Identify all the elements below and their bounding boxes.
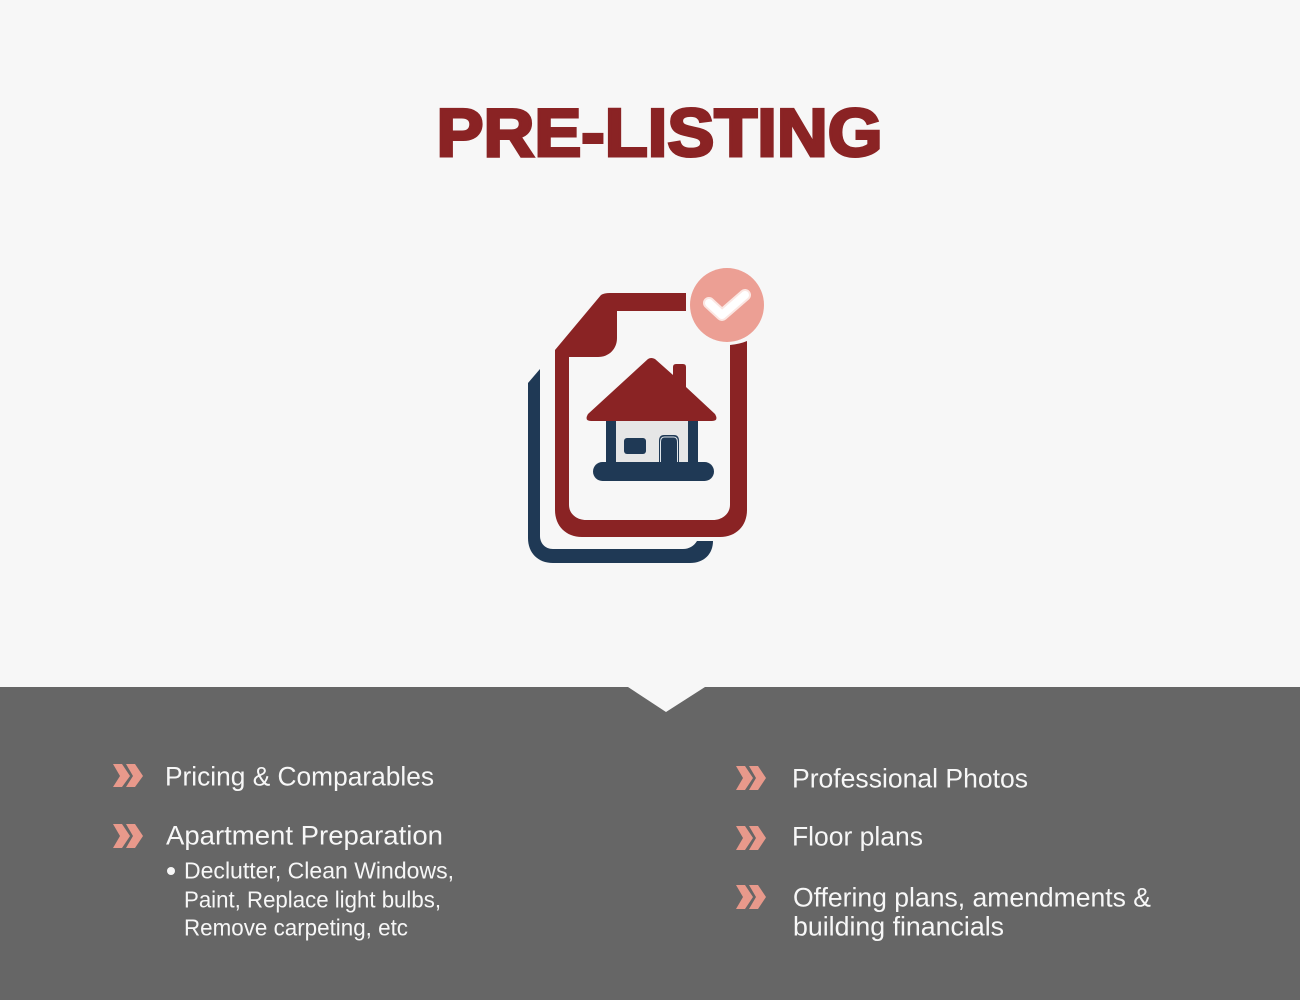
item: photos: Professional Photos bbox=[792, 764, 1028, 794]
roof bbox=[587, 358, 716, 421]
base bbox=[593, 462, 714, 481]
item: apartment preparation: Declutter, Clean Windows, bbox=[184, 858, 454, 884]
item: pricing: Pricing & Comparables bbox=[165, 762, 434, 792]
item: apartment preparation: Remove carpeting, etc bbox=[184, 914, 408, 940]
front document bbox=[555, 293, 747, 537]
panel: checklist bbox=[0, 687, 1300, 1000]
column: left items bbox=[113, 762, 454, 940]
door bbox=[659, 435, 679, 464]
wall bbox=[606, 420, 698, 464]
item: offering plans: Offering plans, amendments & bbox=[793, 882, 1151, 912]
icon: chevrons bbox=[113, 824, 143, 848]
icon: chevrons bbox=[736, 885, 766, 909]
bullet bbox=[167, 867, 175, 875]
item: offering plans: building financials bbox=[793, 912, 1004, 942]
item: floor plans bbox=[736, 822, 923, 852]
item: apartment preparation: Paint, Replace light bulbs, bbox=[184, 886, 441, 912]
house bbox=[587, 358, 716, 481]
title: PRE-LISTING bbox=[436, 95, 882, 171]
item: floor plans: Floor plans bbox=[792, 822, 923, 852]
column: right items bbox=[736, 764, 1151, 942]
item: offering plans bbox=[736, 882, 1151, 942]
check badge bbox=[690, 268, 764, 342]
item: apartment preparation: Apartment Preparation bbox=[166, 820, 443, 850]
back document bbox=[528, 369, 713, 563]
window bbox=[624, 438, 646, 454]
icon: chevrons bbox=[736, 826, 766, 850]
item: apartment preparation bbox=[113, 820, 454, 940]
icon: chevrons bbox=[113, 764, 143, 787]
icon: house document with check mark bbox=[528, 268, 764, 563]
icon: chevrons bbox=[736, 766, 766, 790]
